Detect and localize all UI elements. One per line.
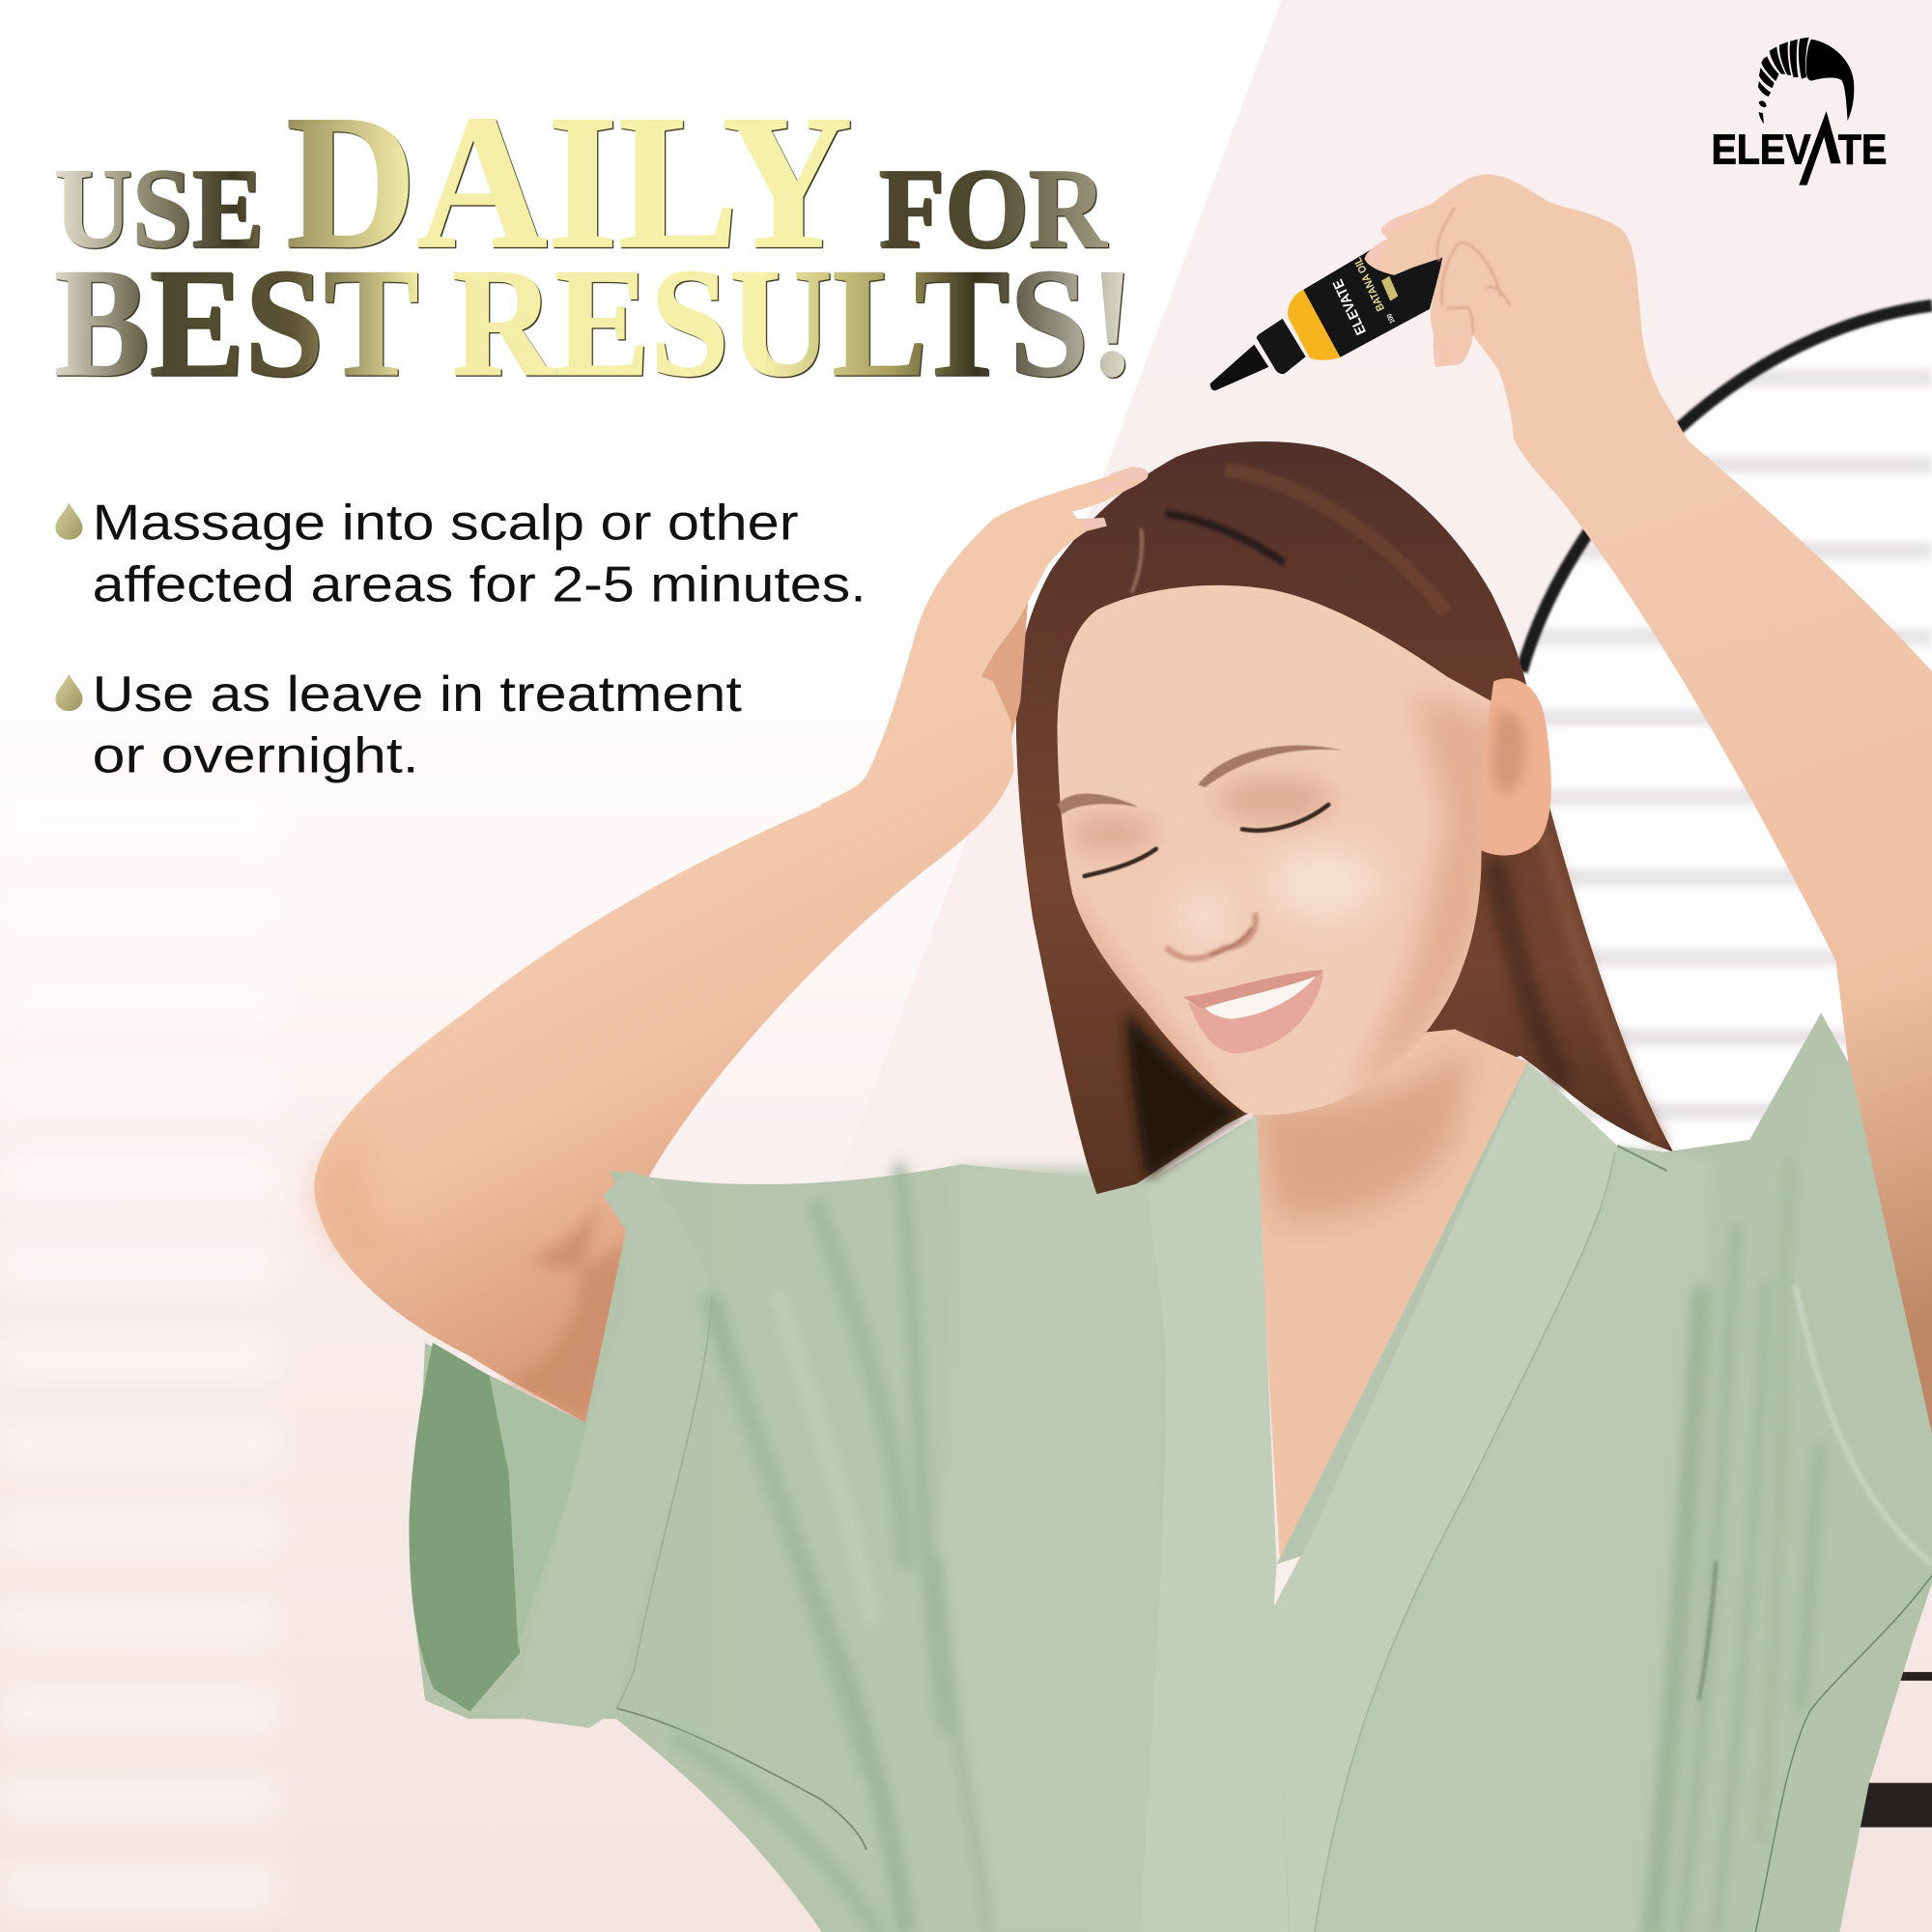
- shoulder seam: [1617, 1146, 1667, 1171]
- face: [1053, 585, 1551, 1115]
- text: massage: affected areas for 2-5 minutes.: [93, 556, 867, 612]
- bottle gold badge: [1381, 276, 1398, 301]
- photo: woman in green robe: [314, 174, 1932, 1932]
- left collar: [1140, 1115, 1289, 1932]
- background: dark furniture rails bottom right: [1855, 1672, 1932, 1828]
- right robe and collar: [1273, 1063, 1932, 1932]
- title line 2: BEST RESULTS!: [54, 237, 1136, 409]
- lips: [1183, 970, 1323, 1054]
- bottle label: [1330, 255, 1397, 337]
- bottle label: BATANA OIL: [1352, 255, 1387, 313]
- face shading: [1053, 692, 1501, 1115]
- background: white diagonal panel: [0, 0, 1282, 1306]
- collar stitch: [1315, 1151, 1615, 1932]
- title line 1: DAILY: [286, 76, 853, 289]
- hair left lock over robe: [1016, 568, 1245, 1194]
- cuff highlight: [1795, 1285, 1932, 1564]
- instruction bullet 1: [55, 496, 867, 612]
- mirror with window reflection: [1521, 305, 1932, 1171]
- instruction bullet 2: [55, 667, 755, 784]
- light chest area: [1315, 1146, 1711, 1932]
- central robe panel: [939, 1168, 1159, 1932]
- icon: oil drop: [55, 674, 82, 711]
- ear inner: [1492, 710, 1526, 795]
- logo peak letter A: [1799, 111, 1841, 185]
- bottle label: ELEVATE: [1330, 276, 1370, 337]
- right hand holding bottle: [1365, 174, 1695, 509]
- logo wordmark: ELEVATE: [1712, 127, 1887, 173]
- right side pleats: [1652, 1162, 1820, 1932]
- eyebrows: [1058, 746, 1344, 814]
- right arm raised: [1540, 425, 1932, 1441]
- logo: Elevate: [1712, 38, 1887, 185]
- underarm shadow: [500, 1201, 625, 1423]
- seam under sleeve: [617, 1709, 867, 1850]
- robe body: [412, 1012, 1932, 1932]
- hair back: [1016, 441, 1673, 1194]
- background: blurred window blinds left: [0, 801, 277, 1910]
- ear: [1479, 678, 1551, 856]
- bottle yellow base: [1288, 290, 1340, 360]
- collar band: [1273, 1063, 1617, 1932]
- title line 1: [54, 76, 1108, 289]
- bottle label: 100: [1384, 312, 1397, 325]
- finger nails: [1077, 467, 1148, 531]
- neck and chest: [1223, 1030, 1529, 1562]
- hair dark under cheek: [1126, 1011, 1242, 1179]
- title: [54, 76, 1136, 409]
- right sleeve cuff: [1795, 1063, 1932, 1576]
- hair right strands: [1496, 819, 1659, 1140]
- hair top details: [1131, 469, 1447, 612]
- product bottle: [1210, 240, 1446, 390]
- neck shadow: [1255, 1040, 1475, 1221]
- title line 1: USE: [54, 146, 264, 271]
- sleeve lining: [409, 1343, 586, 1712]
- dark fold crease: [1699, 1562, 1717, 1700]
- left arm bent: [314, 788, 943, 1423]
- white inner top: [1273, 1556, 1300, 1607]
- finger creases: [1437, 208, 1510, 335]
- elbow shading: [315, 1123, 395, 1257]
- nose: [1166, 913, 1256, 958]
- left hand on head: [821, 467, 1148, 940]
- cuff stitch: [617, 1295, 712, 1709]
- logo hair icon: [1758, 38, 1854, 124]
- icon: oil drop: [55, 502, 82, 540]
- right sleeve seam: [1755, 1576, 1932, 1932]
- text: leave in: or overnight.: [93, 728, 419, 784]
- bottle black body: [1303, 240, 1446, 357]
- text: leave in: Use as leave in treatment: [93, 667, 742, 723]
- left side pleats: [678, 1168, 988, 1932]
- finger nails: [1365, 214, 1459, 367]
- closed eyes: [1085, 805, 1328, 876]
- bottle cap: [1257, 319, 1306, 374]
- text: massage: Massage into scalp or other: [93, 496, 799, 552]
- bottle nozzle: [1210, 345, 1268, 390]
- title line 1: FOR: [878, 146, 1108, 271]
- left sleeve cuff: [470, 1171, 867, 1850]
